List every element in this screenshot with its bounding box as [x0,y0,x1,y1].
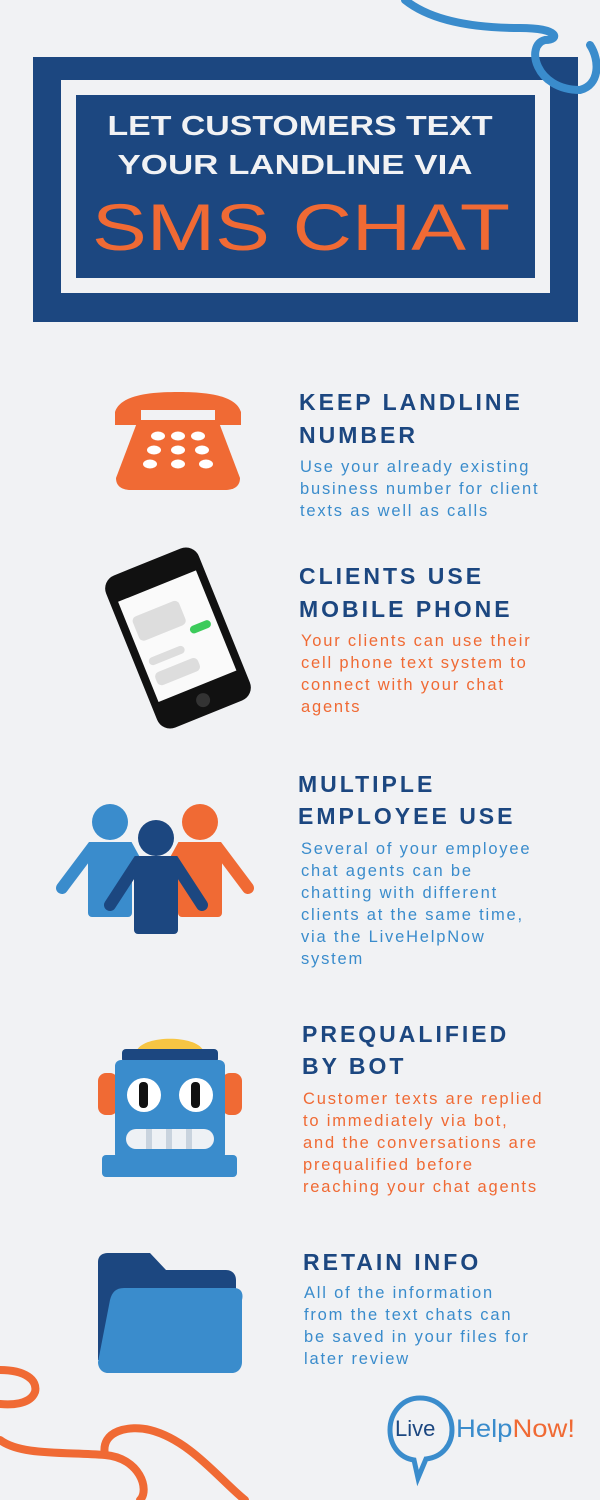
text: retain info: be saved in your files for [304,1328,530,1346]
text: prequalified by bot: reaching your chat agents [303,1178,538,1196]
text: multiple employee use: chatting with different [301,884,498,902]
text: retain info: RETAIN INFO [303,1249,481,1275]
text: clients use mobile phone [299,563,532,716]
text: multiple employee use: EMPLOYEE USE [298,803,515,829]
icon: group of people [62,804,248,934]
icon: mobile phone [101,543,255,733]
text: clients use mobile phone: Your clients can use their [301,632,532,650]
logo: LiveHelpNow: HelpNow! [456,1415,575,1443]
text: multiple employee use: system [301,950,364,968]
text: multiple employee use [298,771,531,968]
text: keep landline number: KEEP LANDLINE [299,389,523,415]
decorative blue squiggle top right [405,0,597,90]
text: prequalified by bot: Customer texts are replied [303,1090,543,1108]
text: retain info [303,1249,530,1368]
icon: landline phone [115,392,241,490]
text: clients use mobile phone: cell phone text system to [301,654,528,672]
logo: LiveHelpNow: Live [395,1416,435,1441]
text: multiple employee use: clients at the same time, [301,906,524,924]
text: keep landline number: NUMBER [299,422,418,448]
text: multiple employee use: Several of your employee [301,840,531,858]
text: retain info: from the text chats can [304,1306,512,1324]
text: clients use mobile phone: CLIENTS USE [299,563,484,589]
text: prequalified by bot [302,1021,543,1196]
text: prequalified by bot: and the conversations are [303,1134,538,1152]
text: keep landline number: business number for client [300,480,539,498]
text: multiple employee use: chat agents can be [301,862,473,880]
decorative orange squiggle bottom left [0,1370,245,1500]
title banner [33,57,578,322]
title banner: YOUR LANDLINE VIA [118,149,472,180]
text: clients use mobile phone: connect with your chat [301,676,505,694]
text: multiple employee use: MULTIPLE [298,771,435,797]
title banner: SMS CHAT [92,190,510,264]
text: prequalified by bot: BY BOT [302,1053,406,1079]
text: keep landline number: texts as well as calls [300,502,489,520]
icon: robot [98,1039,242,1177]
text: prequalified by bot: prequalified before [303,1156,474,1174]
text: prequalified by bot: PREQUALIFIED [302,1021,509,1047]
text: keep landline number [299,389,539,520]
logo: LiveHelpNow [390,1398,575,1478]
text: retain info: later review [304,1350,410,1368]
title banner: LET CUSTOMERS TEXT [108,110,492,141]
text: keep landline number: Use your already existing [300,458,530,476]
text: clients use mobile phone: agents [301,698,361,716]
icon: folder [98,1253,243,1373]
text: prequalified by bot: to immediately via bot, [303,1112,509,1130]
text: clients use mobile phone: MOBILE PHONE [299,596,513,622]
text: retain info: All of the information [304,1284,494,1302]
text: multiple employee use: via the LiveHelpNow [301,928,486,946]
